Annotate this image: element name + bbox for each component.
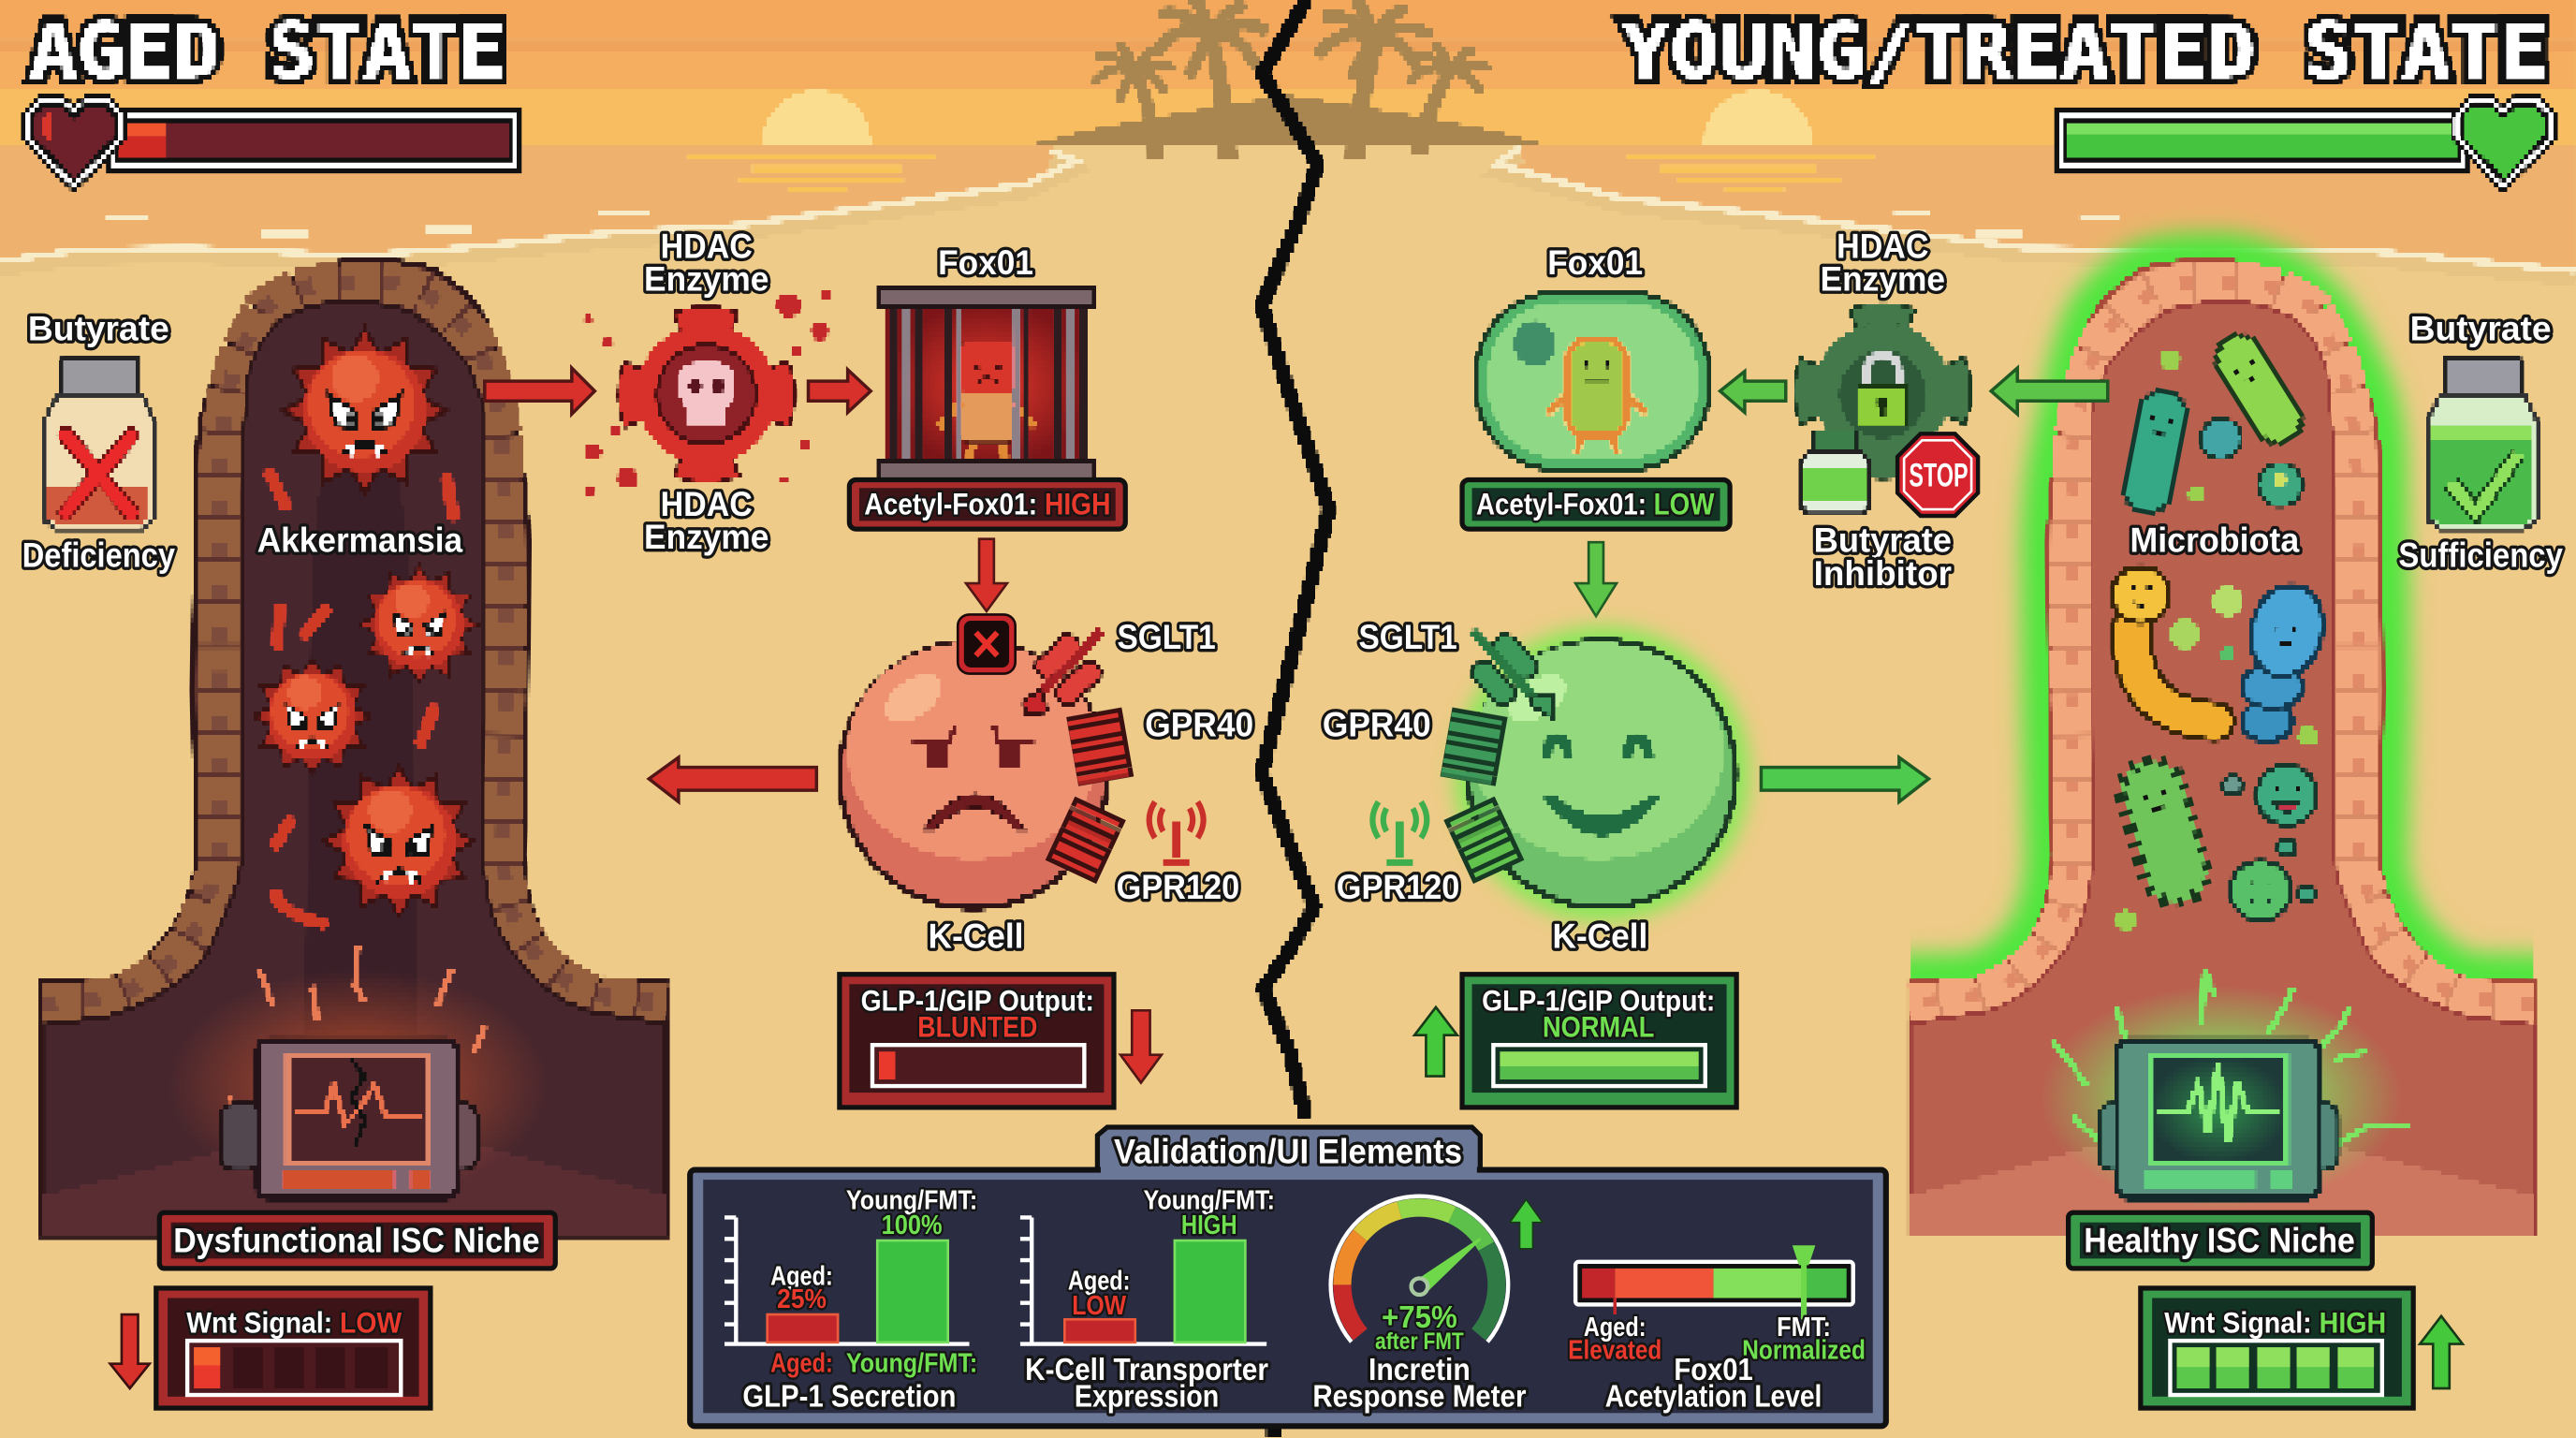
icon: locked HDAC gear (1806, 314, 1960, 468)
receptor: GPR120 cluster young (1446, 799, 1521, 880)
badge: Acetyl-Fox01 low: Acetyl-Fox01: LOW (1476, 487, 1715, 521)
chart: Fox01 acetylation slider: Acetylation Level (1605, 1379, 1822, 1414)
divider: jagged centre crack (1262, 0, 1329, 1438)
chart: GLP-1 secretion bars (724, 1186, 977, 1414)
panel: Validation/UI Elements (690, 1127, 1886, 1426)
label: HDAC Enzyme bottom: HDAC (661, 485, 753, 523)
icon: red antenna (1149, 801, 1204, 862)
panel: GLP-1/GIP output blunted (840, 975, 1114, 1108)
chart: K-cell transporter bars: LOW (1072, 1291, 1127, 1321)
chart: incretin response gauge: after FMT (1375, 1329, 1464, 1355)
chart: K-cell transporter bars: Expression (1075, 1379, 1219, 1414)
label: HDAC Enzyme right (1821, 227, 1945, 299)
chart: GLP-1 secretion bars: Young/FMT: (846, 1186, 977, 1216)
arrow: output up (1414, 1007, 1457, 1077)
chart: K-cell transporter bars: Young/FMT: (1144, 1186, 1275, 1216)
background: sunset beach (0, 0, 2576, 275)
icon: stop sign (1897, 433, 1978, 516)
icon: blue microbe (2242, 578, 2332, 741)
chart: K-cell transporter bars: K-Cell Transporter (1025, 1353, 1268, 1387)
badge: Acetyl-Fox01 low (1462, 479, 1730, 529)
label: GPR120: GPR120 (1117, 868, 1239, 906)
red bacteria fragments (270, 473, 453, 923)
panel: GLP-1/GIP output blunted: BLUNTED (917, 1009, 1037, 1043)
chart: Fox01 acetylation slider: Fox01 (1674, 1353, 1753, 1387)
icon: dysfunctional monitor (222, 1040, 476, 1197)
icon: empty butyrate bottle (44, 359, 153, 529)
label: GPR40 right: GPR40 (1323, 705, 1431, 743)
icon: spiky green bacillus (2115, 754, 2214, 910)
icon: happy cocci (2223, 766, 2317, 920)
label: Butyrate: Butyrate (28, 309, 169, 347)
panel: GLP-1/GIP output normal: GLP-1/GIP Output: (1482, 983, 1715, 1017)
icon: angry virus lower (324, 766, 475, 917)
chart: GLP-1 secretion bars: 25% (777, 1284, 827, 1314)
panel: Wnt signal high: Wnt Signal: HIGH (2164, 1305, 2386, 1339)
panel: aged ISC niche villus (43, 261, 666, 1236)
receptor: GPR40 aged (1068, 711, 1131, 785)
health bar: young (2056, 95, 2554, 191)
label: HDAC Enzyme right: Enzyme (1821, 260, 1945, 299)
label: K-Cell: K-Cell (929, 917, 1023, 956)
icon: full heart (2452, 95, 2554, 191)
arrow: HDAC to Fox01 right (1720, 372, 1786, 413)
label: Akkermansia: Akkermansia (257, 521, 463, 560)
receptor: GPR40 young (1442, 711, 1504, 785)
panel: healthy ISC niche villus (1910, 261, 2533, 1236)
label: Deficiency: Deficiency (22, 536, 175, 574)
icon: inhibitor bottle (1801, 431, 1869, 514)
icon: teal rod microbe (2119, 388, 2191, 516)
chart: GLP-1 secretion bars: 100% (882, 1211, 943, 1240)
chart: incretin response gauge: +75% (1382, 1300, 1457, 1335)
chart: Fox01 acetylation slider: FMT: (1777, 1313, 1831, 1343)
label: Microbiota: Microbiota (2130, 521, 2300, 560)
label: SGLT1: SGLT1 (1117, 618, 1216, 656)
icon: green rod microbe (2208, 327, 2310, 452)
chart: Fox01 acetylation slider: Elevated (1568, 1335, 1661, 1365)
arrow: Fox01 to K-cell (966, 539, 1007, 611)
icon: angry virus (359, 565, 478, 683)
badge: Acetyl-Fox01 high (849, 479, 1125, 529)
panel: Wnt signal high (2141, 1288, 2413, 1408)
arrow: microbiota to HDAC (1991, 368, 2108, 414)
arrow: Wnt down (110, 1314, 150, 1388)
label: K-Cell right: K-Cell (1553, 917, 1647, 956)
chart: GLP-1 secretion bars: Aged: (770, 1348, 833, 1378)
arrow: output down (1120, 1010, 1162, 1083)
icon: depleted heart (23, 95, 124, 191)
icon: happy K-cell (1454, 626, 1749, 922)
icon: green antenna (1372, 801, 1427, 862)
label plate: Healthy ISC Niche: Healthy ISC Niche (2084, 1221, 2355, 1259)
title: aged state: AGED STATE (30, 7, 506, 95)
health bar: aged (23, 95, 520, 191)
arrow: gauge up (1510, 1199, 1543, 1249)
arrow: Fox01 to K-cell right (1575, 542, 1617, 616)
label: HDAC Enzyme bottom: Enzyme (644, 518, 768, 556)
label: GPR120 right: GPR120 (1337, 868, 1459, 906)
icon: healthy monitor (2100, 1040, 2337, 1197)
chart: K-cell transporter bars: Aged: (1068, 1267, 1131, 1297)
chart: GLP-1 secretion bars: GLP-1 Secretion (742, 1379, 956, 1414)
lightning bolts (2054, 969, 2408, 1151)
arrow: K-cell to healthy niche (1761, 757, 1928, 801)
panel: Validation/UI Elements: Validation/UI Elements (1114, 1133, 1462, 1171)
icon: yellow worm microbe (2113, 566, 2215, 721)
label: SGLT1 right: SGLT1 (1358, 618, 1457, 656)
panel: Wnt signal low: Wnt Signal: LOW (186, 1305, 402, 1339)
chart: GLP-1 secretion bars: Aged: (770, 1261, 833, 1291)
panel: Wnt signal low (156, 1288, 431, 1408)
chart: GLP-1 secretion bars: Young/FMT: (846, 1348, 977, 1378)
chart: incretin response gauge (1312, 1196, 1543, 1414)
island with palm trees (1032, 0, 1544, 159)
label: Butyrate Inhibitor: Inhibitor (1814, 554, 1952, 593)
receptor: SGLT1 young (1469, 631, 1553, 718)
red particles (584, 291, 831, 494)
chart: incretin response gauge: Incretin (1368, 1353, 1471, 1387)
icon: full butyrate bottle (2428, 359, 2537, 529)
panel: GLP-1/GIP output normal (1462, 975, 1736, 1108)
receptor: SGLT1 aged (1023, 631, 1104, 714)
chart: incretin response gauge: Response Meter (1312, 1379, 1526, 1414)
title: young/treated state: YOUNG/TREATED STATE (1621, 7, 2548, 95)
icon: blocked badge (958, 614, 1016, 674)
arrow: akkermansia to HDAC (485, 368, 594, 414)
receptor: GPR120 cluster aged (1048, 799, 1123, 880)
label plate: Healthy ISC Niche (2069, 1212, 2372, 1269)
chart: Fox01 acetylation slider: Aged: (1584, 1313, 1647, 1343)
label: Fox01 caged: Fox01 (938, 243, 1033, 282)
label plate: Dysfunctional ISC Niche (159, 1212, 555, 1269)
icon: HDAC gear with skull (629, 317, 783, 472)
icon: round microbes (2116, 350, 2318, 930)
icon: angry virus (253, 657, 372, 775)
panel: GLP-1/GIP output blunted: GLP-1/GIP Output: (861, 983, 1094, 1017)
icon: angry virus large (283, 329, 446, 493)
label: Fox01 free: Fox01 (1547, 243, 1643, 282)
label plate: Dysfunctional ISC Niche: Dysfunctional ISC Niche (173, 1221, 540, 1259)
chart: Fox01 acetylation slider (1568, 1245, 1866, 1414)
badge: Acetyl-Fox01 high: Acetyl-Fox01: HIGH (864, 487, 1110, 521)
label: Butyrate Inhibitor (1814, 521, 1952, 593)
icon: stop sign: STOP (1909, 457, 1969, 493)
chart: K-cell transporter bars: HIGH (1181, 1211, 1237, 1240)
icon: healthy Fox01 cell (1477, 292, 1708, 470)
label: HDAC Enzyme bottom (644, 485, 768, 556)
label: HDAC Enzyme top: HDAC (661, 227, 753, 266)
arrow: HDAC to Fox01 (809, 370, 871, 413)
chart: Fox01 acetylation slider: Normalized (1742, 1335, 1866, 1365)
label: Butyrate Inhibitor: Butyrate (1814, 521, 1952, 560)
sparks (230, 945, 485, 1108)
label: HDAC Enzyme top (644, 227, 768, 299)
label: HDAC Enzyme top: Enzyme (644, 260, 768, 299)
arrow: K-cell to niche (649, 757, 816, 801)
arrow: Wnt up (2420, 1316, 2463, 1388)
label: Butyrate right: Butyrate (2410, 309, 2552, 347)
panel: GLP-1/GIP output normal: NORMAL (1543, 1009, 1654, 1043)
label: HDAC Enzyme right: HDAC (1837, 227, 1928, 266)
chart: K-cell transporter bars (1020, 1186, 1275, 1414)
icon: caged Fox01 (881, 287, 1094, 478)
label: GPR40: GPR40 (1145, 705, 1253, 743)
icon: sad K-cell (841, 641, 1106, 908)
